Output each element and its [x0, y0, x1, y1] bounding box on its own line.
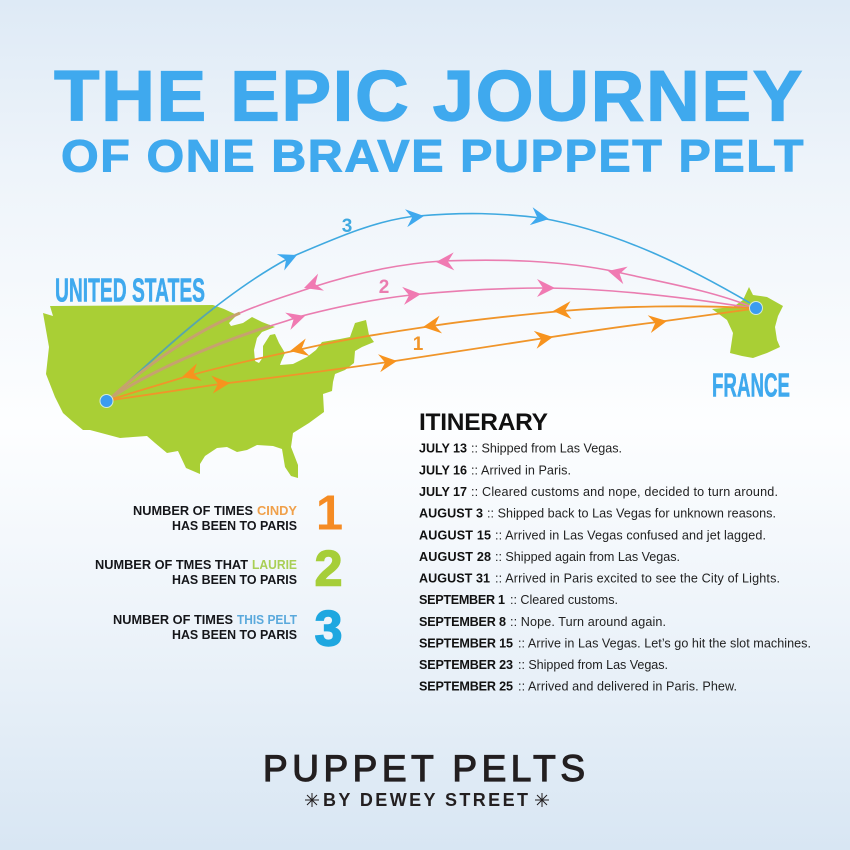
itinerary list: :: Shipped from Las Vegas. [471, 442, 622, 456]
panel: journey map [43, 207, 790, 478]
logo: Puppet Pelts by Dewey Street: PUPPET PELTS [263, 748, 585, 789]
route 3: blue arc [112, 207, 750, 397]
logo: Puppet Pelts by Dewey Street [263, 748, 585, 810]
icon: left star [305, 793, 319, 807]
itinerary heading: ITINERARY [419, 409, 548, 436]
legend row: this pelt: NUMBER OF TIMES [113, 612, 233, 627]
itinerary list: AUGUST 3 [419, 507, 483, 521]
legend row: this pelt: 3 [315, 600, 342, 656]
legend row: Laurie [95, 540, 342, 596]
itinerary list: SEPTEMBER 1 [419, 593, 505, 607]
title [54, 58, 805, 182]
marker: Paris [750, 302, 762, 314]
panel: visit counts legend [95, 486, 343, 656]
itinerary list: :: Nope. Turn around again. [510, 615, 666, 629]
itinerary list: SEPTEMBER 15 [419, 636, 513, 650]
itinerary list: :: Shipped back to Las Vegas for unknown reasons. [487, 507, 776, 521]
itinerary list: :: Arrived and delivered in Paris. Phew. [518, 680, 737, 694]
legend row: Laurie: 2 [315, 540, 342, 596]
title: OF ONE BRAVE PUPPET PELT [61, 130, 805, 182]
legend row: Laurie: HAS BEEN TO PARIS [172, 572, 297, 587]
itinerary list: :: Arrive in Las Vegas. Let’s go hit the slot machines. [518, 636, 811, 650]
legend row: this pelt [113, 600, 342, 656]
itinerary list: AUGUST 28 [419, 550, 491, 564]
marker: Las Vegas [100, 394, 113, 408]
itinerary list: JULY 16 [419, 463, 467, 477]
map: France [712, 287, 783, 358]
legend row: Cindy: HAS BEEN TO PARIS [172, 518, 297, 533]
itinerary list: JULY 13 [419, 442, 467, 456]
itinerary list: :: Arrived in Las Vegas confused and jet lagged. [495, 528, 766, 542]
itinerary list: :: Shipped from Las Vegas. [518, 658, 668, 672]
icon: right star [535, 793, 549, 807]
itinerary list: :: Cleared customs and nope, decided to turn around. [471, 485, 778, 499]
itinerary list: :: Arrived in Paris excited to see the City of Lights. [495, 572, 780, 586]
label: United States: UNITED STATES [55, 272, 205, 310]
route 1: orange arcs [112, 301, 752, 400]
route number 2: 2 [379, 277, 389, 298]
itinerary list: :: Cleared customs. [510, 593, 618, 607]
legend row: Cindy: CINDY [257, 503, 297, 518]
legend row: this pelt: THIS PELT [237, 612, 297, 627]
route number 1: 1 [413, 334, 424, 355]
itinerary list: SEPTEMBER 23 [419, 658, 513, 672]
title: THE EPIC JOURNEY [54, 58, 804, 136]
label: France: FRANCE [712, 366, 790, 404]
legend row: Laurie: NUMBER OF TMES THAT [95, 557, 248, 572]
itinerary list: :: Arrived in Paris. [471, 463, 571, 477]
itinerary list: :: Shipped again from Las Vegas. [495, 550, 680, 564]
route number 3: 3 [342, 216, 352, 237]
itinerary list: AUGUST 31 [419, 572, 490, 586]
itinerary list [419, 442, 811, 694]
itinerary list: SEPTEMBER 25 [419, 680, 513, 694]
itinerary list: SEPTEMBER 8 [419, 615, 506, 629]
itinerary list: JULY 17 [419, 485, 467, 499]
itinerary list: AUGUST 15 [419, 528, 491, 542]
legend row: Cindy [133, 486, 343, 540]
logo: Puppet Pelts by Dewey Street: BY DEWEY STREET [323, 790, 528, 810]
legend row: this pelt: HAS BEEN TO PARIS [172, 627, 297, 642]
map: United States [43, 305, 374, 478]
route 2: pink arcs [112, 252, 752, 397]
legend row: Laurie: LAURIE [252, 557, 297, 572]
legend row: Cindy: NUMBER OF TIMES [133, 503, 253, 518]
panel: itinerary [419, 409, 811, 694]
legend row: Cindy: 1 [316, 486, 343, 540]
